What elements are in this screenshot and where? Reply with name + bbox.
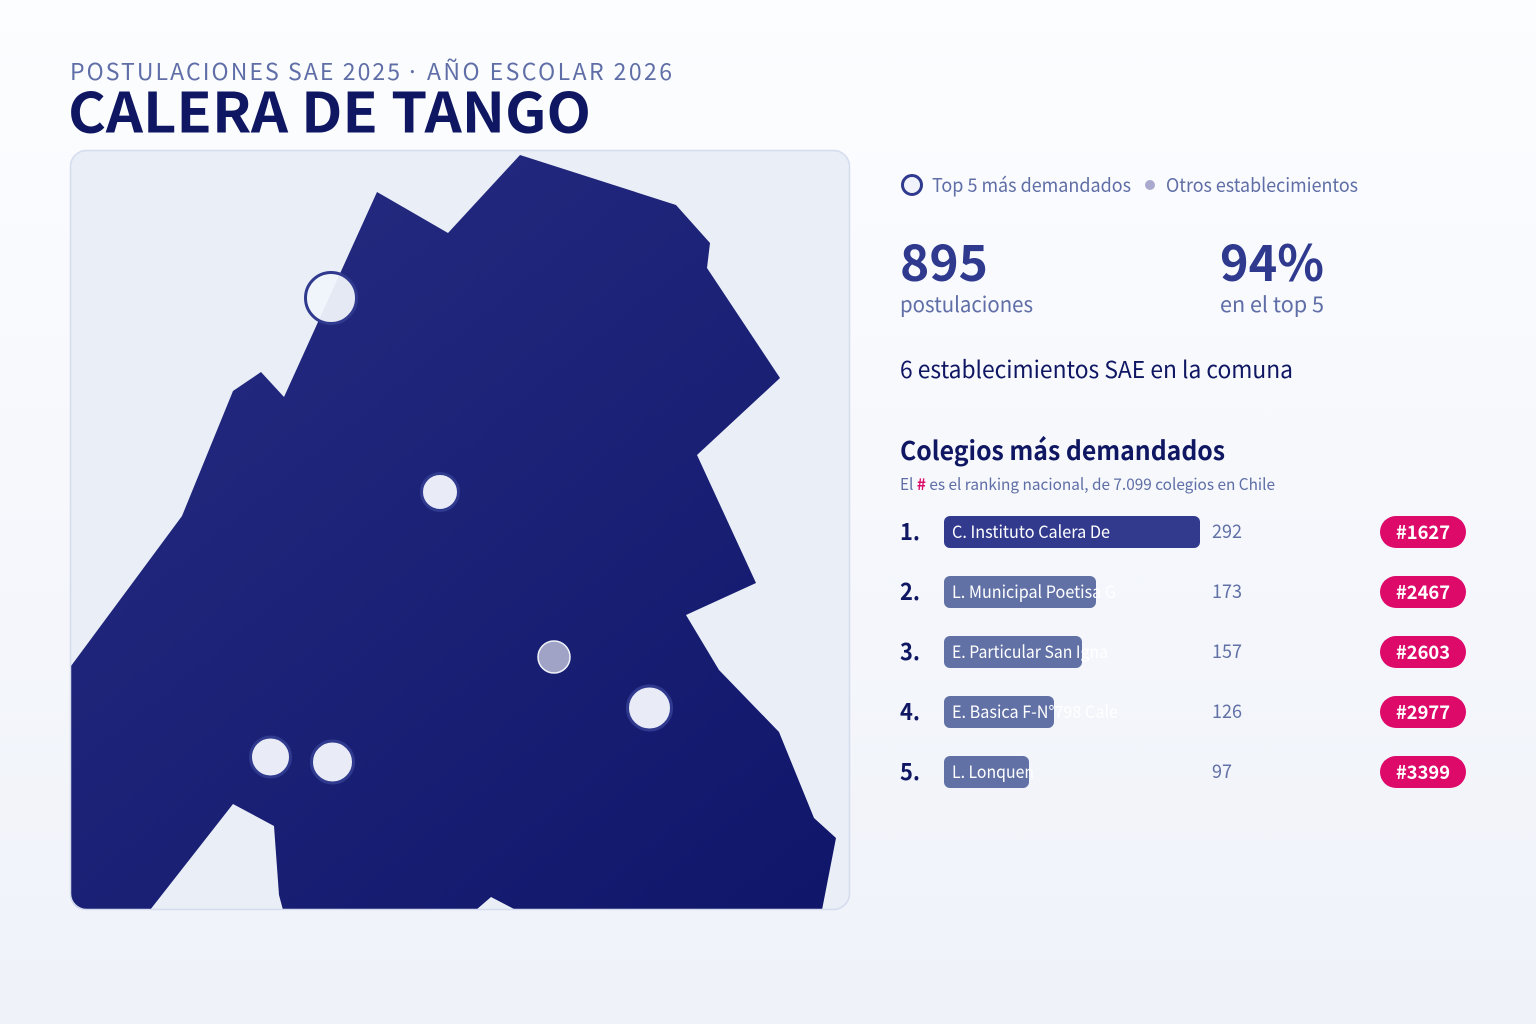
- row 5: 5.: [900, 753, 920, 787]
- subtitle: ·: [406, 53, 419, 87]
- heading: most demanded schools: Colegios más demandados: [900, 431, 1225, 468]
- stat: applications: 895: [900, 224, 988, 296]
- marker: top school 4: [250, 737, 290, 777]
- title: CALERA DE TANGO: [68, 68, 591, 148]
- stat: applications: [900, 224, 1033, 319]
- row 4: [900, 693, 1466, 728]
- map: comuna shape: [71, 155, 836, 910]
- legend: other label: Otros establecimientos: [1166, 171, 1358, 198]
- subtitle: POSTULACIONES SAE 2025: [70, 53, 400, 87]
- row 1: C. Instituto Calera De: [952, 518, 1110, 543]
- row 2: [900, 573, 1466, 608]
- row 2: 173: [1212, 577, 1242, 604]
- legend: other marker: [1145, 180, 1155, 190]
- marker: top school 1: [306, 272, 356, 324]
- stat: top 5 share: 94%: [1220, 224, 1324, 296]
- row 1: 292: [1212, 517, 1242, 544]
- marker: other school: [538, 641, 570, 673]
- row 1: 1.: [900, 513, 920, 547]
- stat: applications: postulaciones: [900, 288, 1033, 319]
- marker: top school 3: [628, 686, 672, 730]
- row 3: #2603: [1396, 638, 1450, 665]
- marker: top school 5: [312, 741, 354, 783]
- row 1: [900, 513, 1466, 548]
- note: El # es el ranking nacional, de 7.099 colegios en Chile: [900, 471, 1275, 495]
- row 3: [900, 633, 1466, 668]
- row 5: 97: [1212, 757, 1232, 784]
- row 4: E. Basica F-N°798 Cale: [952, 698, 1118, 723]
- row 2: L. Municipal Poetisa G: [952, 578, 1116, 603]
- row 5: [900, 753, 1466, 788]
- row 1: #1627: [1396, 518, 1450, 545]
- row 4: 4.: [900, 693, 920, 727]
- row 4: #2977: [1396, 698, 1450, 725]
- row 3: 157: [1212, 637, 1242, 664]
- row 2: #2467: [1396, 578, 1450, 605]
- legend: top 5 label: Top 5 más demandados: [932, 171, 1131, 198]
- row 5: L. Lonquen: [952, 758, 1034, 783]
- panel: map: [70, 150, 850, 910]
- legend: [902, 171, 1358, 198]
- stat: top 5 share: en el top 5: [1220, 288, 1324, 319]
- row 2: 2.: [900, 573, 920, 607]
- subtitle: [70, 53, 672, 87]
- row 4: 126: [1212, 697, 1242, 724]
- row 3: E. Particular San Igna: [952, 638, 1108, 663]
- row 3: 3.: [900, 633, 920, 667]
- legend: top 5 marker: [902, 176, 922, 194]
- schools count: 6 establecimientos SAE en la comuna: [900, 351, 1293, 385]
- subtitle: AÑO ESCOLAR 2026: [427, 53, 672, 87]
- marker: top school 2: [422, 474, 458, 510]
- row 5: #3399: [1396, 758, 1450, 785]
